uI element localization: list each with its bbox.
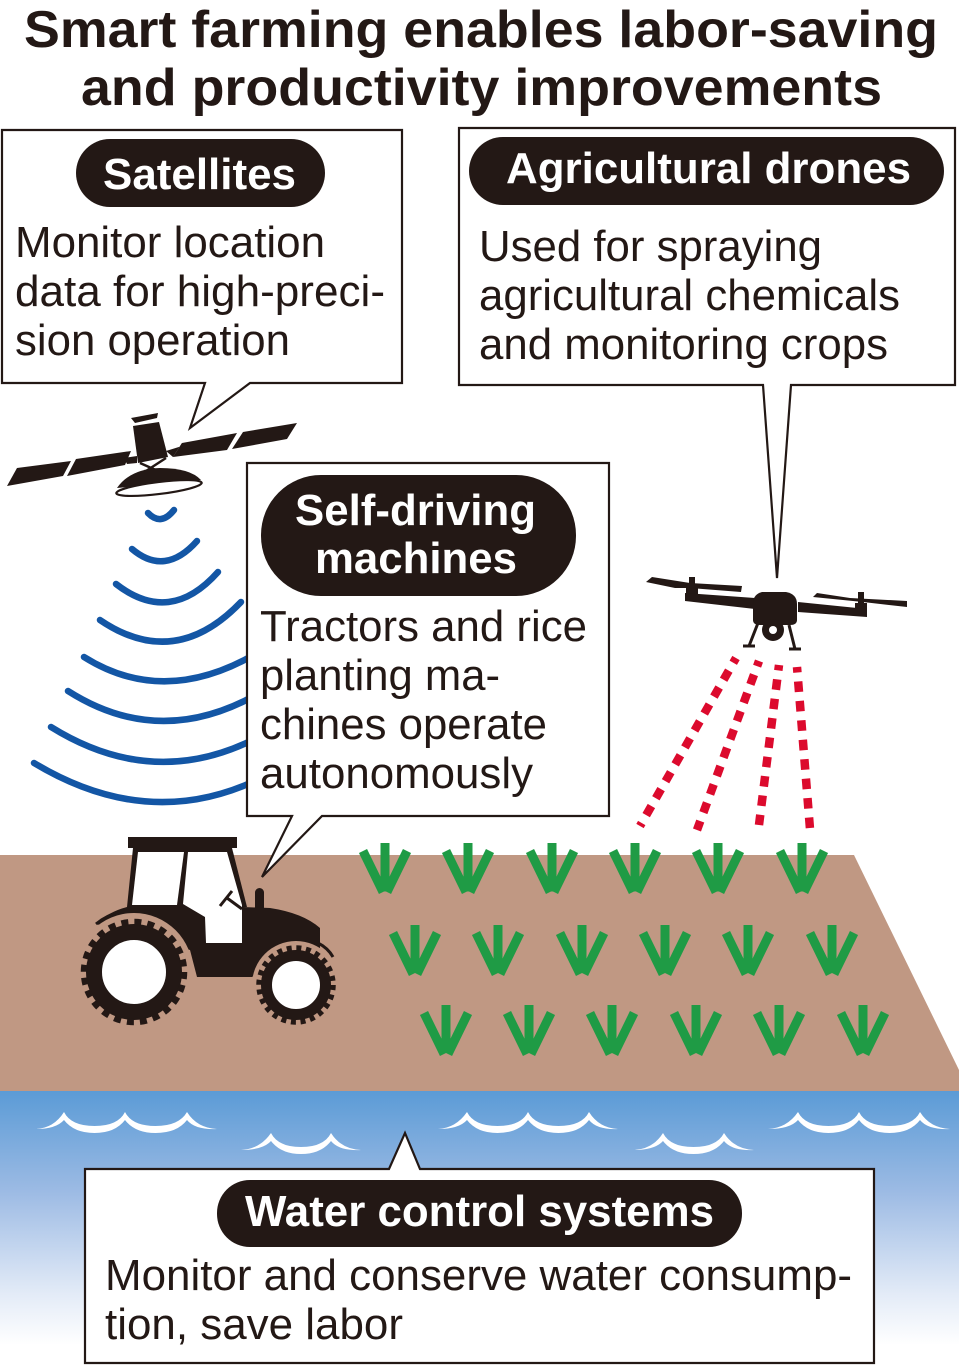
spray	[640, 658, 810, 830]
water area	[0, 1091, 959, 1368]
field	[0, 855, 959, 1091]
panel: self-driving machines	[247, 463, 609, 877]
title: and productivity improvements	[81, 59, 882, 117]
panel: satellites	[2, 130, 402, 428]
panel: water control systems	[85, 1133, 874, 1363]
text: water control description	[105, 1251, 852, 1349]
text: drones description	[479, 222, 900, 369]
drone	[646, 577, 907, 649]
title	[24, 1, 938, 117]
text: drones description: agricultural chemicals	[479, 271, 900, 320]
text: satellites description: Monitor location	[15, 218, 325, 267]
title: Smart farming enables labor-saving	[24, 1, 938, 59]
heading: satellites	[76, 139, 325, 207]
text: drones description: Used for spraying	[479, 222, 822, 271]
tractor	[60, 837, 342, 1037]
water waves	[36, 1112, 950, 1154]
text: self-driving description: autonomously	[260, 749, 533, 798]
heading: agricultural drones: Agricultural drones	[506, 144, 911, 193]
text: self-driving description: chines operate	[260, 700, 547, 749]
heading: water control systems: Water control systems	[245, 1187, 714, 1236]
text: self-driving description: Tractors and rice	[260, 602, 587, 651]
heading: self-driving machines: Self-driving	[295, 486, 536, 535]
panel: agricultural drones	[459, 128, 955, 578]
text: drones description: and monitoring crops	[479, 320, 888, 369]
satellite signal waves	[34, 510, 300, 802]
heading: self-driving machines: machines	[315, 534, 517, 583]
text: satellites description: sion operation	[15, 316, 290, 365]
heading: agricultural drones	[469, 137, 944, 205]
text: satellites description: data for high-preci-	[15, 267, 385, 316]
text: water control description: tion, save labor	[105, 1300, 403, 1349]
heading: water control systems	[217, 1180, 742, 1247]
satellite	[7, 413, 297, 499]
heading: self-driving machines	[261, 475, 576, 596]
text: water control description: Monitor and conserve water consump-	[105, 1251, 852, 1300]
text: self-driving description: planting ma-	[260, 651, 500, 700]
text: self-driving description	[260, 602, 587, 798]
text: satellites description	[15, 218, 385, 365]
seedlings	[363, 843, 885, 1054]
heading: satellites: Satellites	[103, 150, 296, 199]
